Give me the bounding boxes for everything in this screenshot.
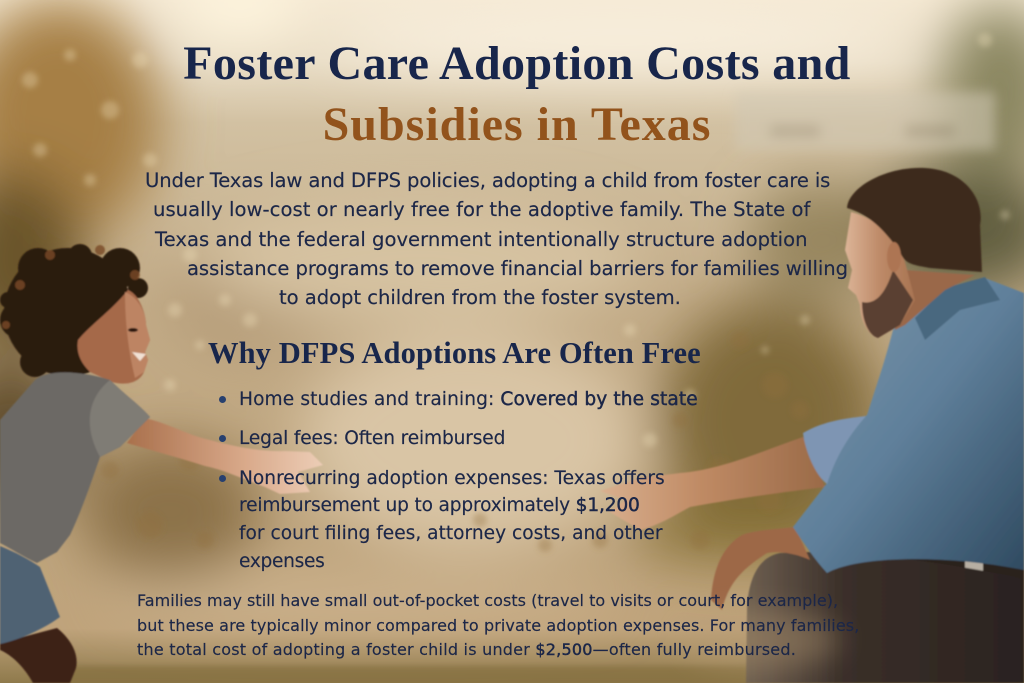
- face: [78, 290, 150, 384]
- bullet: nonrecurring expenses: for court filing fees, attorney costs, and other: [239, 523, 662, 544]
- pants and bent knee: [746, 552, 1024, 683]
- closing note: the total cost of adopting a foster child is under $2,500—often fully reimbursed.: [137, 640, 796, 659]
- haze over the father where the closing note runs: [680, 610, 840, 670]
- bullet: home studies: Home studies and training: Covered by the state: [239, 389, 698, 410]
- shorts: [0, 546, 60, 644]
- intro paragraph: assistance programs to remove financial barriers for families willing: [187, 257, 848, 280]
- title: [183, 37, 851, 151]
- face: [845, 212, 915, 338]
- rolled sleeve: [803, 416, 866, 484]
- beard: [862, 270, 913, 338]
- neck: [895, 270, 975, 330]
- collar: [915, 277, 1000, 340]
- bench behind him: [880, 540, 1024, 582]
- outstretched arm: [127, 418, 323, 494]
- title: Subsidies in Texas: [323, 98, 711, 151]
- shirt: [793, 278, 1024, 573]
- intro paragraph: Texas and the federal government intentionally structure adoption: [155, 228, 808, 251]
- leg: [0, 628, 77, 683]
- section heading: Why DFPS Adoptions Are Often Free: [208, 336, 701, 370]
- hair: [847, 168, 982, 272]
- intro paragraph: to adopt children from the foster system.: [279, 286, 681, 309]
- closing note: Families may still have small out-of-pocket costs (travel to visits or court, for example),: [137, 591, 838, 610]
- title: Foster Care Adoption Costs and: [183, 37, 851, 90]
- hair: [0, 244, 148, 377]
- father: [600, 168, 1024, 683]
- bullet: legal fees: Legal fees: Often reimbursed: [239, 428, 505, 449]
- shirt: [0, 372, 150, 563]
- bullet: nonrecurring expenses: [219, 468, 665, 572]
- ear: [887, 242, 901, 272]
- bokeh lights and leaves: [22, 33, 1010, 552]
- intro paragraph: usually low-cost or nearly free for the adoptive family. The State of: [153, 198, 810, 221]
- lower hand on knee: [711, 527, 810, 610]
- closing note: [137, 591, 859, 659]
- forearm reaching out: [600, 437, 825, 530]
- child: [0, 244, 323, 683]
- closing note: but these are typically minor compared to private adoption expenses. For many families,: [137, 616, 859, 634]
- bullet: nonrecurring expenses: expenses: [239, 551, 325, 572]
- bullet: nonrecurring expenses: Nonrecurring adoption expenses: Texas offers: [239, 468, 665, 489]
- grass edge at the bottom: [60, 666, 750, 683]
- intro paragraph: Under Texas law and DFPS policies, adopting a child from foster care is: [145, 169, 830, 192]
- distant building: [735, 92, 995, 150]
- bullet list: [219, 389, 698, 572]
- bullet: nonrecurring expenses: reimbursement up to approximately $1,200: [239, 495, 640, 516]
- intro paragraph: [145, 169, 848, 309]
